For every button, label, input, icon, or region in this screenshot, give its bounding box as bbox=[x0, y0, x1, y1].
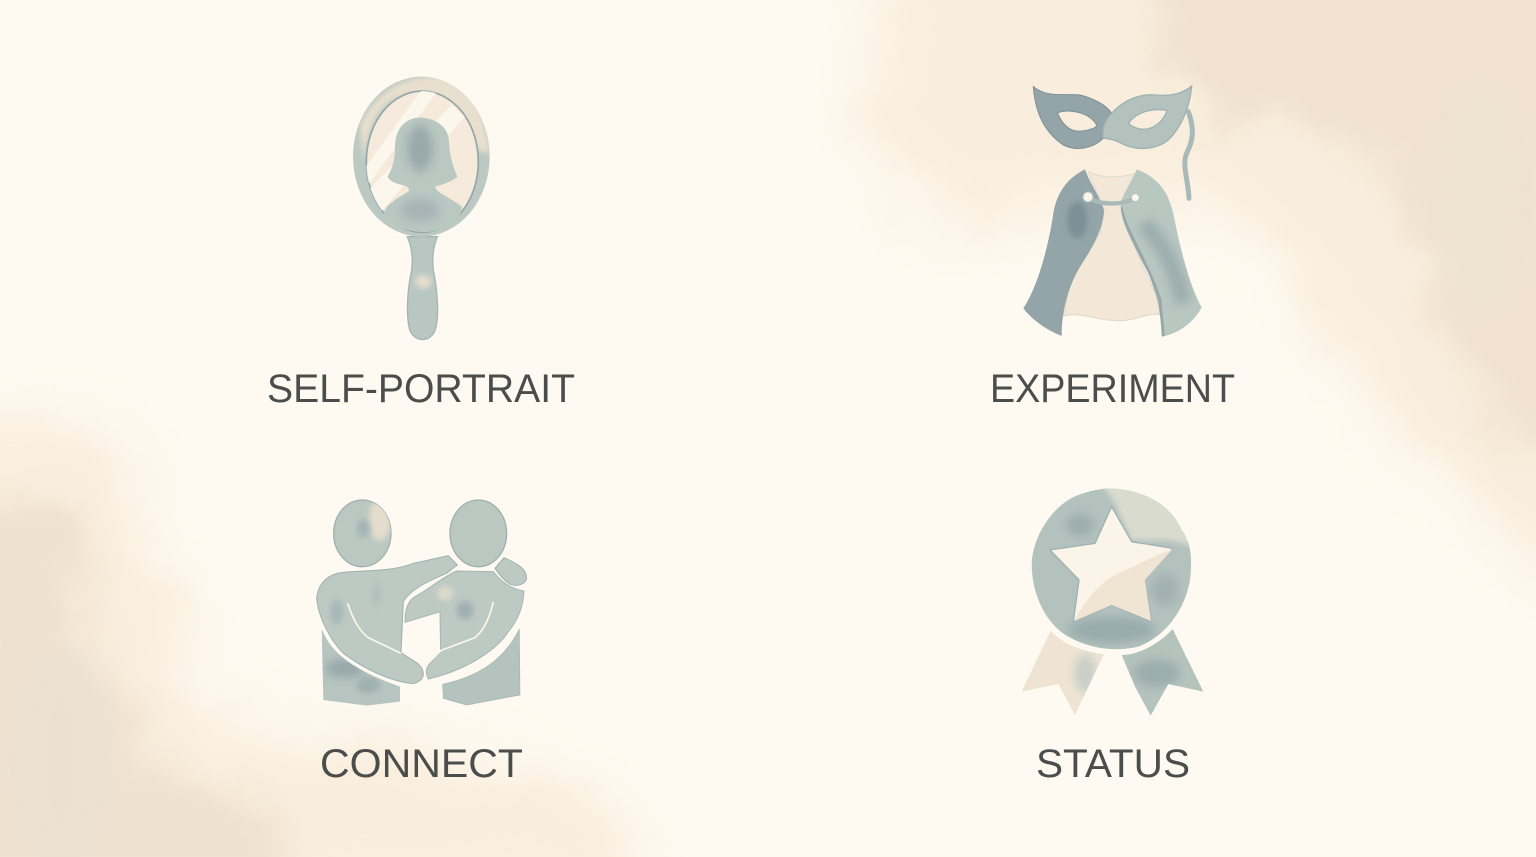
mask bbox=[1033, 87, 1112, 148]
icon: mask and cape bbox=[1020, 86, 1205, 340]
cape left side bbox=[1024, 170, 1104, 336]
silhouette bbox=[384, 118, 462, 232]
left person body and arm bbox=[317, 556, 457, 684]
right person head bbox=[450, 500, 507, 567]
left arm slit bbox=[348, 603, 401, 653]
handle shading bbox=[415, 275, 431, 288]
left person head bbox=[334, 499, 391, 567]
right arm slit bbox=[428, 602, 493, 663]
cape clasp bbox=[1083, 192, 1139, 203]
mirror frame bbox=[352, 75, 492, 238]
cape lining bbox=[1063, 172, 1162, 321]
mask strap bbox=[1185, 112, 1192, 198]
label: self-portrait: SELF-PORTRAIT bbox=[267, 367, 575, 411]
icon: award badge bbox=[1018, 483, 1205, 717]
left ribbon bbox=[1022, 630, 1104, 715]
right person lower body bbox=[443, 629, 520, 705]
star bbox=[1050, 507, 1173, 622]
icon: two people embracing bbox=[317, 499, 527, 707]
hand on shoulder bbox=[495, 558, 527, 585]
label: experiment: EXPERIMENT bbox=[990, 367, 1235, 411]
label: status: STATUS bbox=[1036, 742, 1190, 786]
left person lower body bbox=[320, 627, 403, 707]
mirror glass bbox=[366, 91, 478, 232]
medal disc bbox=[1028, 483, 1195, 652]
mirror handle bbox=[407, 237, 438, 340]
right ribbon bbox=[1118, 627, 1205, 717]
glass reflection bbox=[366, 91, 465, 210]
label: connect: CONNECT bbox=[320, 742, 523, 786]
right person body and arm bbox=[405, 571, 524, 679]
body shading bbox=[330, 583, 474, 624]
icon: hand mirror bbox=[352, 75, 492, 340]
cape right side bbox=[1118, 167, 1205, 340]
